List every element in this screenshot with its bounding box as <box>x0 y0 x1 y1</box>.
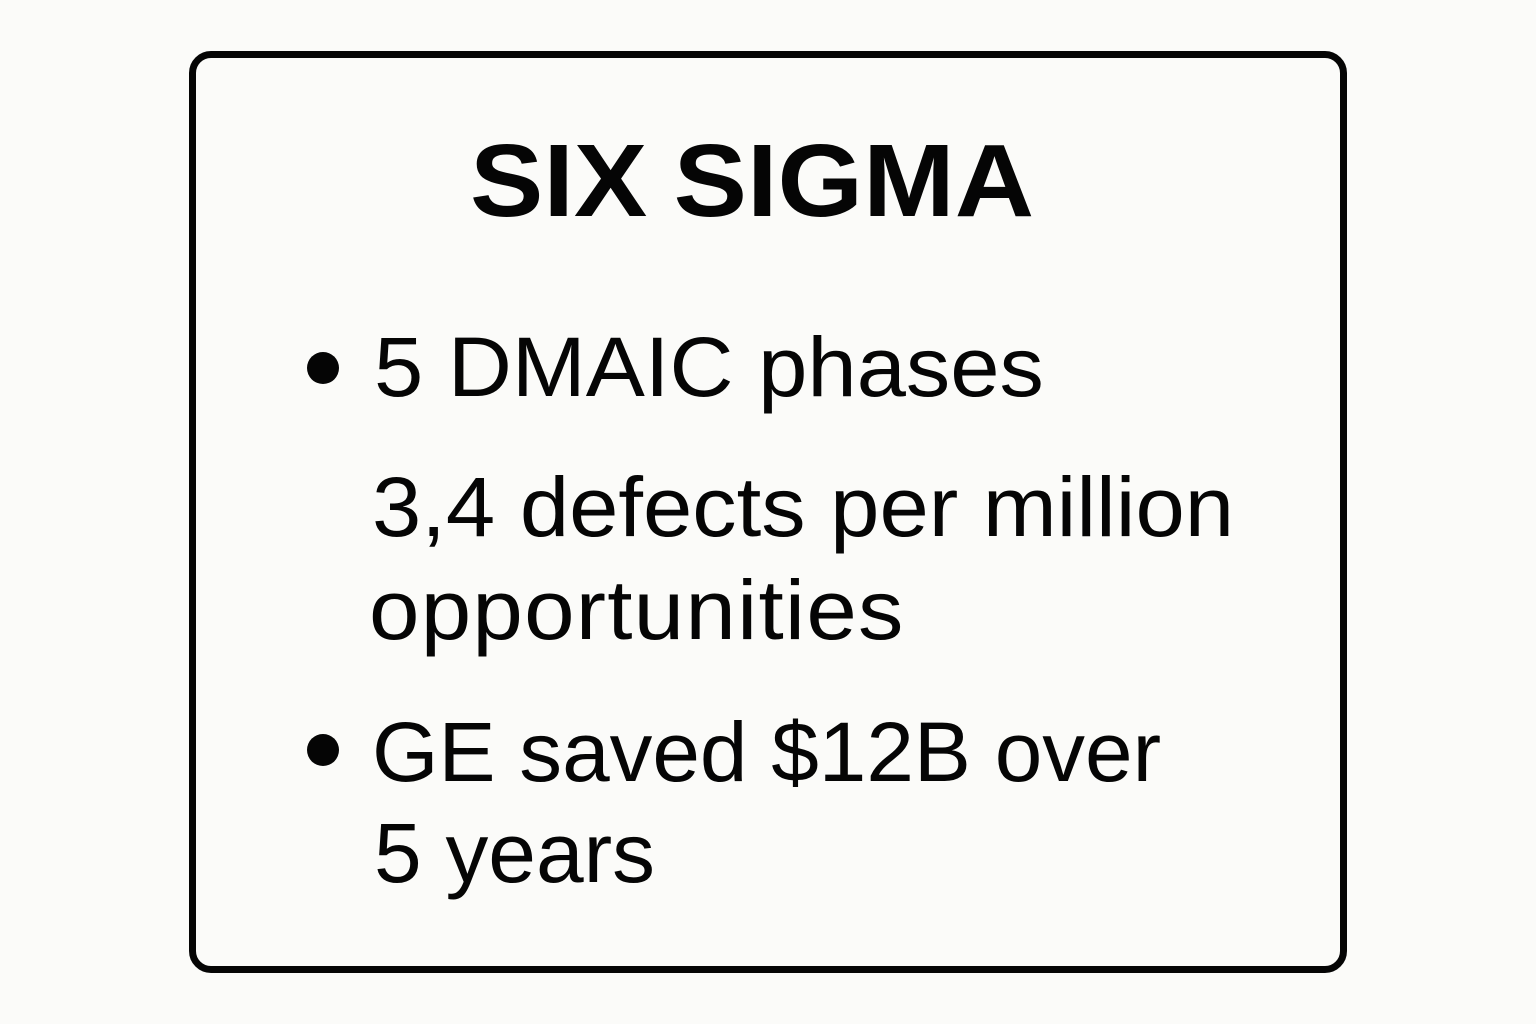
text: defects per million: 3,4 defects per million <box>372 460 1234 554</box>
text: GE savings: GE saved $12B over <box>372 705 1161 799</box>
title: SIX SIGMA <box>470 123 1034 238</box>
text: DMAIC phases: 5 DMAIC phases <box>374 320 1044 414</box>
text: defects per million <box>369 460 1234 657</box>
text: defects per million: opportunities <box>369 563 905 657</box>
icon: bullet 1 <box>307 352 339 384</box>
icon: bullet 2 <box>307 734 339 766</box>
panel: six sigma card <box>189 51 1347 973</box>
text: GE savings <box>372 705 1161 900</box>
text: GE savings: 5 years <box>374 806 655 900</box>
